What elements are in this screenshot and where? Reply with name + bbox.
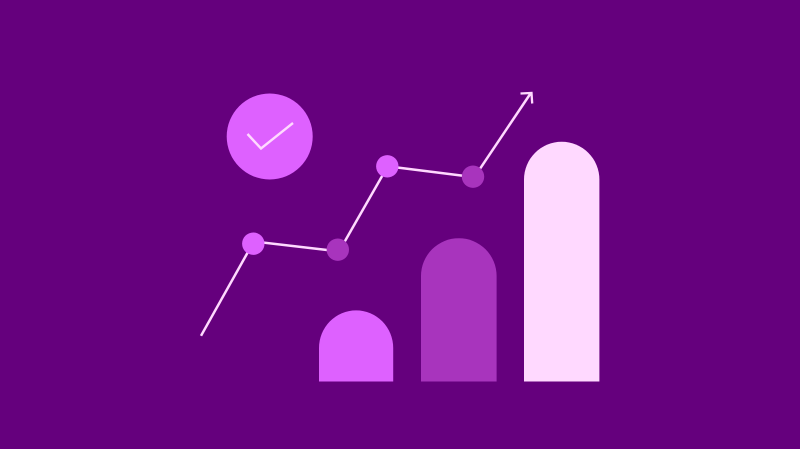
bar: medium	[421, 238, 497, 382]
bar chart	[319, 142, 599, 382]
bar: tall	[524, 142, 599, 382]
bar: short	[319, 310, 393, 382]
arrowhead	[520, 93, 532, 104]
data point 1	[242, 232, 264, 255]
data point 3	[376, 155, 398, 178]
data point 4	[462, 166, 484, 188]
line chart with arrow	[201, 93, 532, 336]
trend line	[201, 94, 530, 336]
data point 2	[327, 238, 349, 261]
icon: checkmark badge	[227, 94, 313, 180]
